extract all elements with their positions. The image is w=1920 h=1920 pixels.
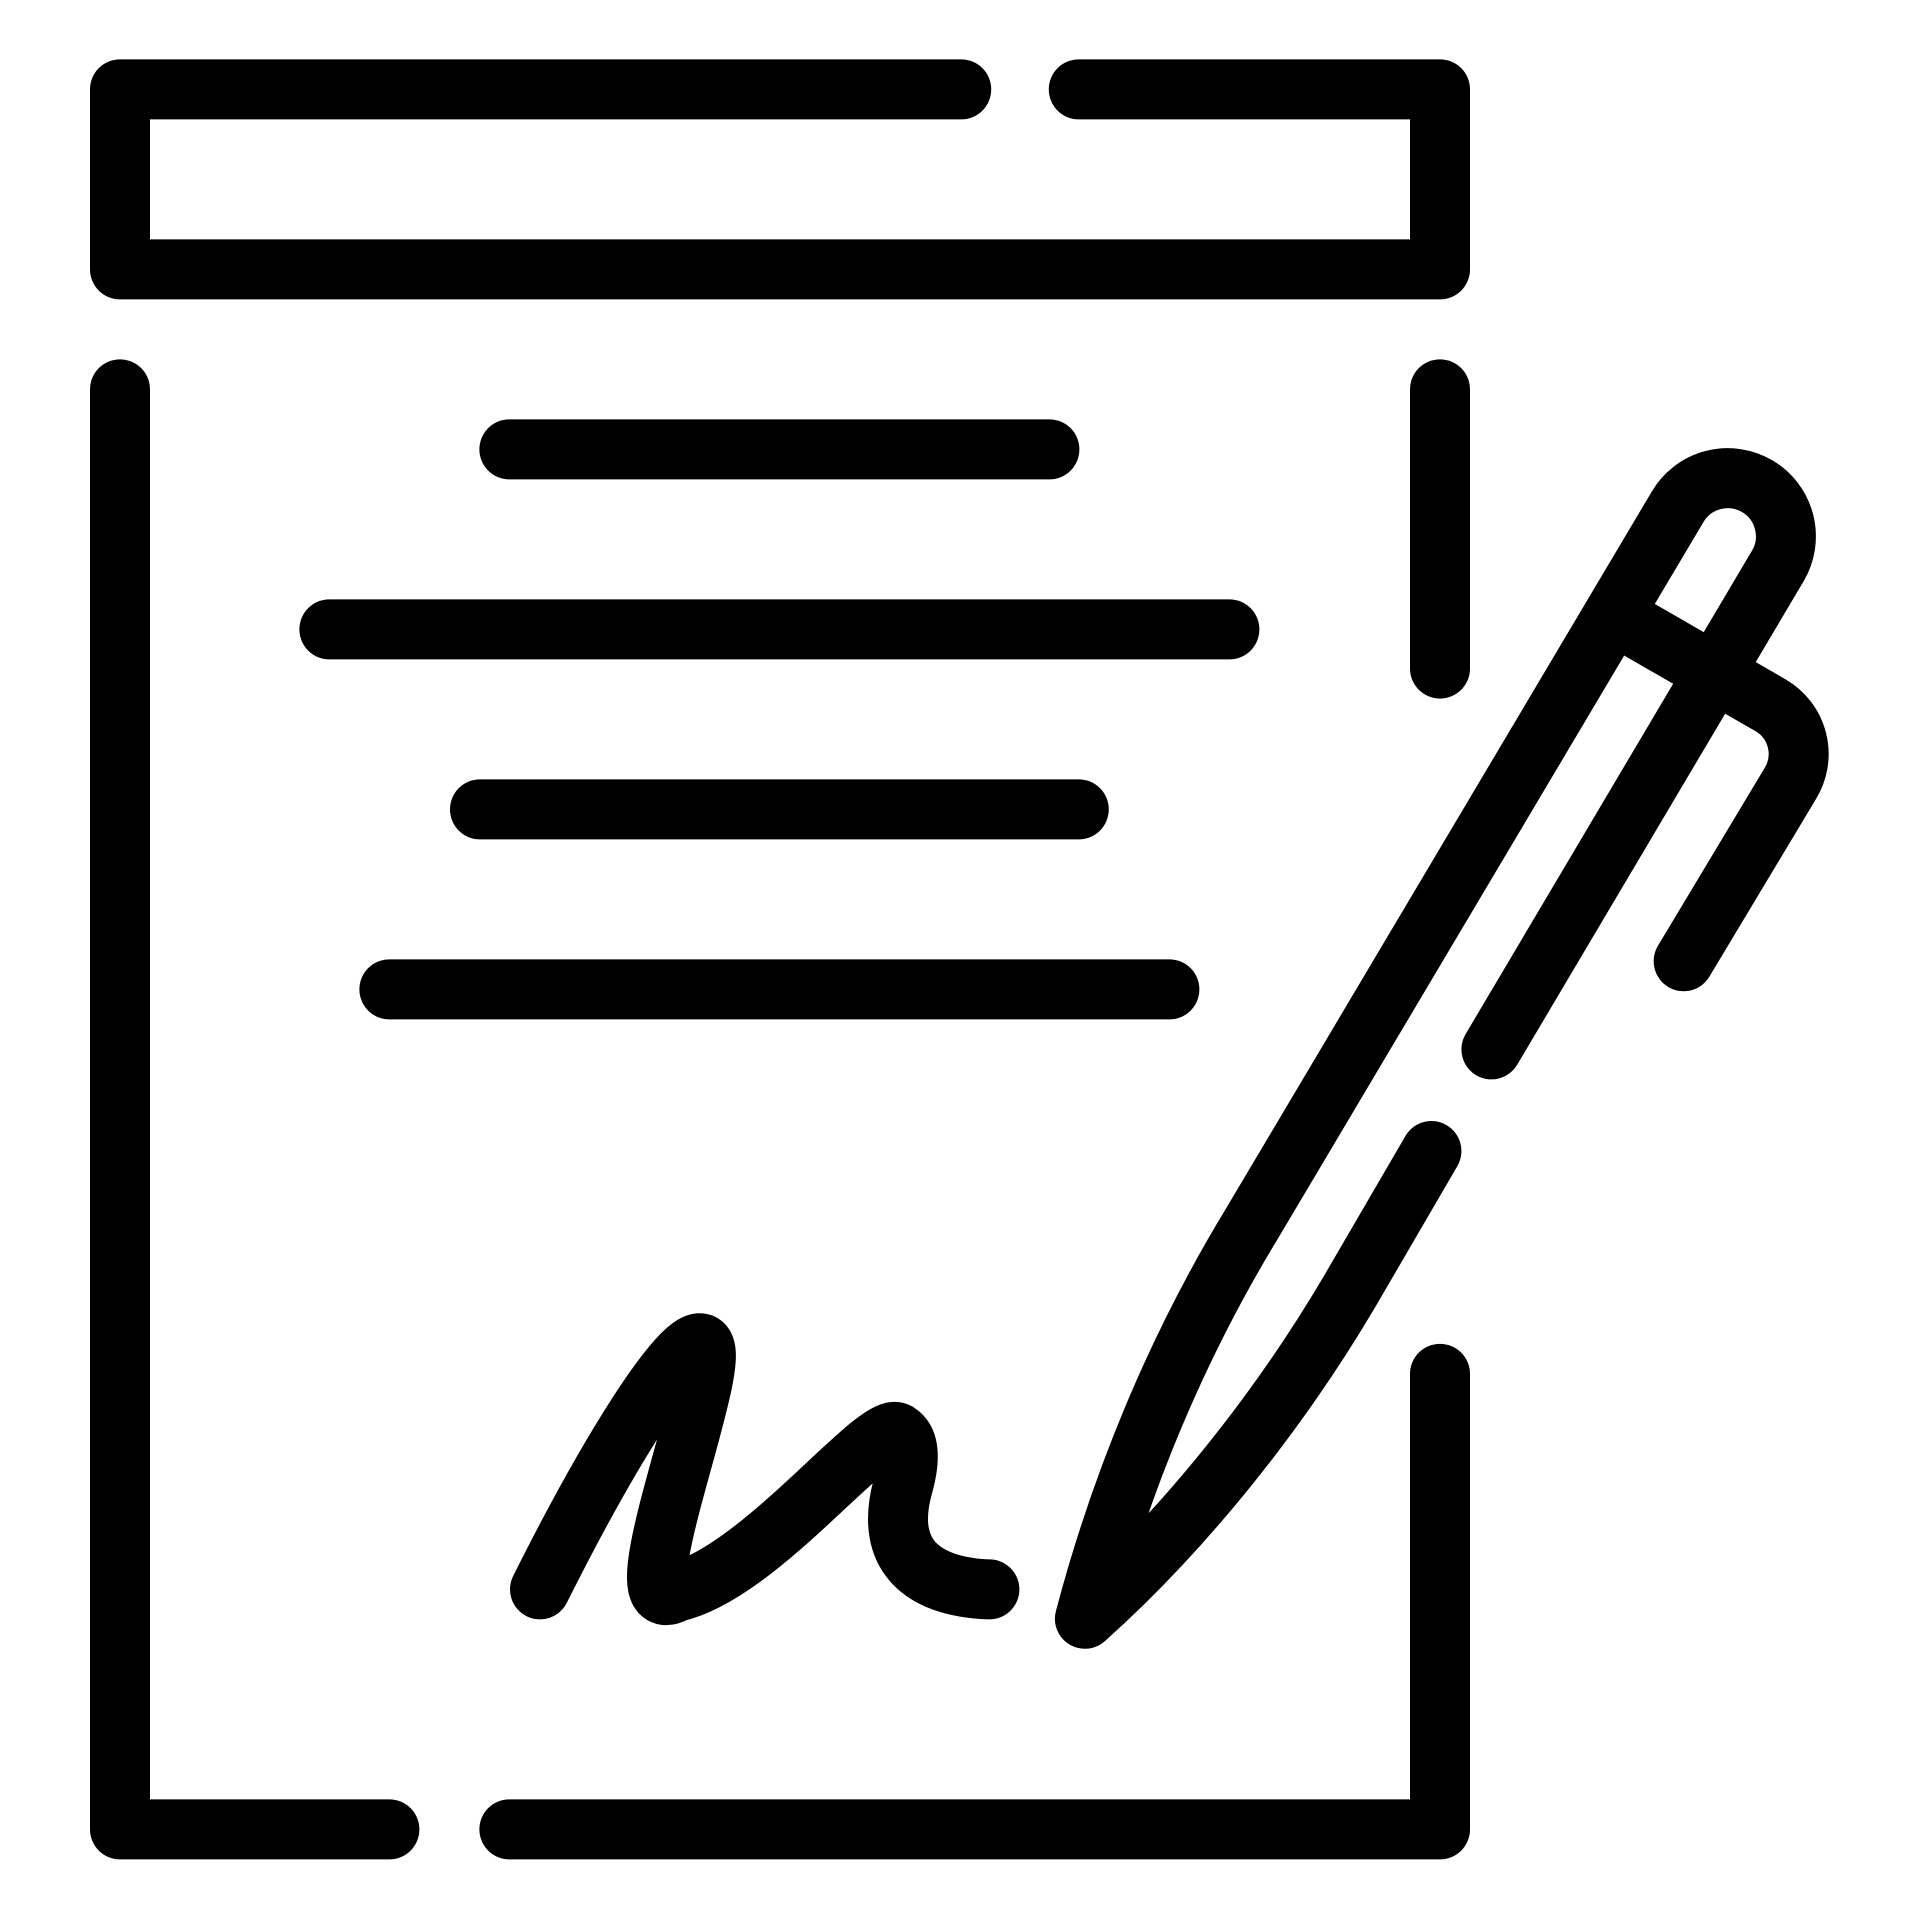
text lines xyxy=(329,449,1229,989)
header bar xyxy=(120,89,1440,269)
icon: pen xyxy=(1085,478,1799,1619)
document frame left and bottom xyxy=(120,389,1440,1829)
signature xyxy=(540,1343,989,1595)
